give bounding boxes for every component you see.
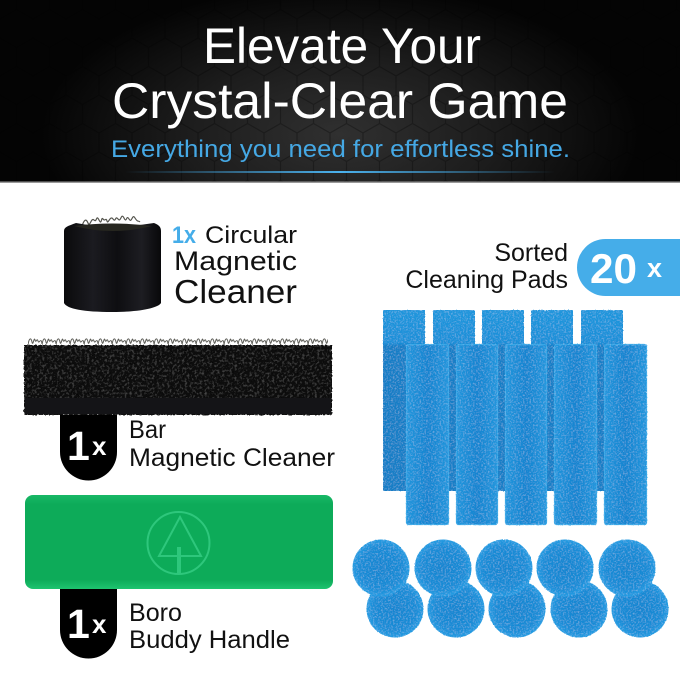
label: circular magnetic cleaner: Cleaner: [174, 273, 297, 310]
rectangular pads: front row: [406, 344, 646, 524]
label: bar magnetic cleaner: [129, 416, 335, 472]
label: sorted cleaning pads: Sorted: [494, 239, 568, 267]
label: boro buddy handle: Boro: [129, 599, 182, 627]
label: bar magnetic cleaner: Bar: [129, 416, 166, 444]
badge: 1x: 1: [67, 423, 90, 469]
badge: 1x: 1: [67, 601, 90, 647]
item: sorted cleaning pads: [352, 239, 680, 638]
icon: tree logo: [148, 512, 210, 574]
title: Elevate Your: [203, 18, 481, 74]
item: boro buddy handle: [25, 495, 333, 658]
item: circular magnetic cleaner: [64, 216, 297, 312]
badge: 1x: [60, 589, 117, 658]
label: boro buddy handle: Buddy Handle: [129, 626, 290, 654]
badge: 1x: x: [92, 609, 107, 639]
label: boro buddy handle: [129, 599, 290, 654]
subtitle: Everything you need for effortless shine.: [111, 136, 570, 163]
label: sorted cleaning pads: Cleaning Pads: [405, 266, 568, 294]
title: [112, 18, 568, 129]
blue glow underline: [125, 171, 555, 173]
title: Crystal-Clear Game: [112, 73, 568, 129]
icon: green handle: [25, 495, 333, 589]
rectangular pads: back row: [383, 310, 623, 491]
label: bar magnetic cleaner: Magnetic Cleaner: [129, 444, 335, 472]
icon: black cylinder: [64, 216, 161, 312]
icon: hook-and-loop bar: [24, 336, 332, 415]
label: circular magnetic cleaner: Magnetic: [174, 246, 297, 276]
header banner: [0, 0, 680, 183]
badge: 20x: [577, 239, 680, 296]
badge: 1x: [60, 415, 117, 480]
item: bar magnetic cleaner: [24, 336, 335, 480]
badge: 20x: x: [647, 253, 662, 283]
round pads: top row: [352, 540, 656, 596]
label: circular magnetic cleaner: [172, 222, 297, 310]
badge: 20x: 20: [590, 245, 637, 292]
round pads: bottom row: [366, 580, 668, 638]
badge: 1x: x: [92, 431, 107, 461]
label: circular magnetic cleaner: Circular: [205, 222, 297, 249]
label: circular magnetic cleaner: 1x: [172, 222, 197, 249]
label: sorted cleaning pads: [405, 239, 568, 294]
